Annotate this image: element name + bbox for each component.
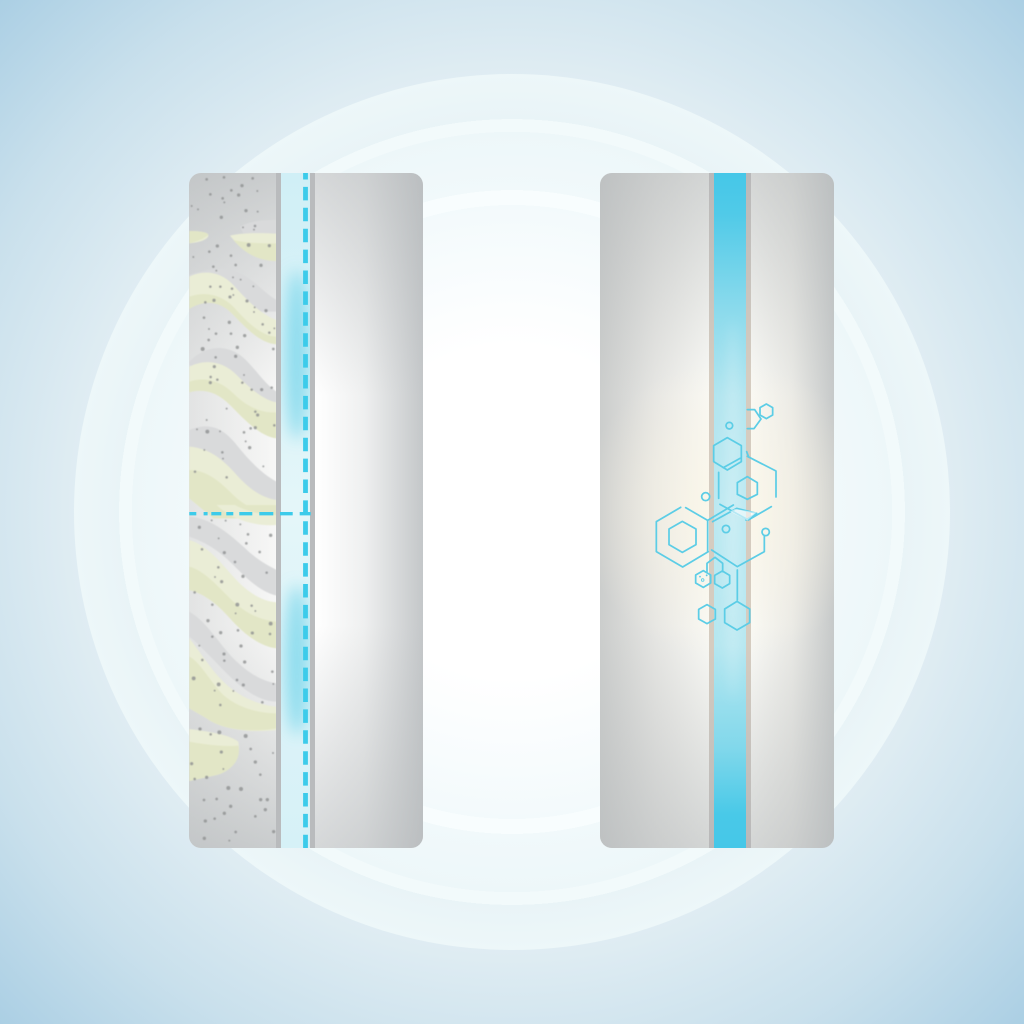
right smooth layer bbox=[750, 173, 834, 848]
lower small hexagons bbox=[696, 557, 730, 588]
membrane strips bbox=[709, 173, 751, 848]
lower gray waves bbox=[189, 517, 277, 702]
blue core layer bbox=[714, 173, 746, 848]
lower green waves bbox=[189, 505, 276, 746]
blue waterproof layer bbox=[281, 173, 310, 848]
green waves bbox=[189, 231, 277, 518]
panel: right wall section with molecules bbox=[600, 173, 834, 848]
left smooth layer bbox=[600, 173, 710, 848]
large upper hexagon bbox=[719, 452, 776, 520]
gray membrane strips bbox=[276, 173, 315, 848]
vertical dashed line bbox=[303, 173, 308, 848]
horizontal dash-dot line bbox=[189, 512, 311, 515]
panel: left wall section with stone layer bbox=[189, 173, 423, 848]
speckles bbox=[191, 176, 276, 479]
highlight at ring junction bbox=[730, 509, 757, 520]
warm glow bbox=[618, 443, 834, 577]
smooth outer layer bbox=[315, 173, 423, 848]
large left hexagon bbox=[656, 505, 733, 567]
gray waves bbox=[189, 220, 277, 502]
top and bottom shading bbox=[600, 173, 834, 848]
linker to small circle bbox=[712, 528, 769, 600]
concentric rings bbox=[74, 74, 950, 950]
icon: molecular structure bbox=[656, 404, 776, 630]
small top hexagons bbox=[747, 404, 773, 429]
stone layer with waves bbox=[189, 173, 277, 848]
